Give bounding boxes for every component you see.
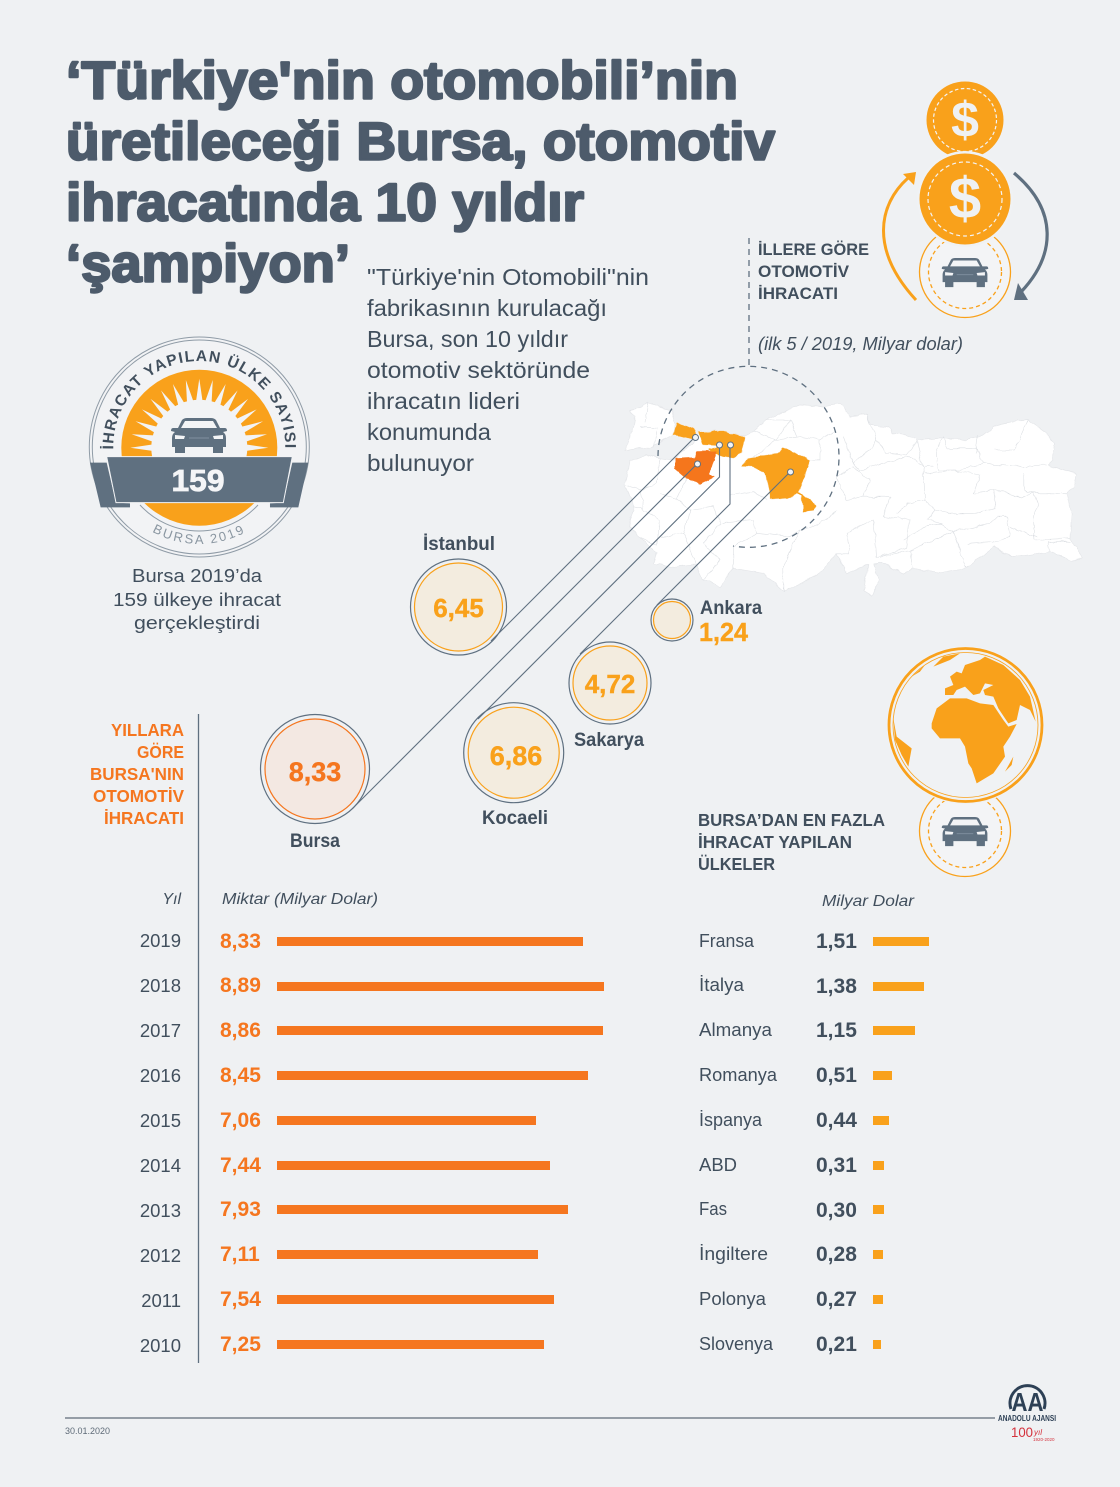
- province: Ankara: 1,24: [699, 617, 749, 647]
- bar chart: exports by year: 8,86: [220, 1019, 261, 1042]
- bar chart: top destination countries: 1,51: [816, 930, 857, 953]
- province: Kocaeli: 6,86: [490, 741, 542, 771]
- car: [171, 418, 227, 453]
- title: ihracatında 10 yıldır: [66, 174, 584, 232]
- bar chart: exports by year: 7,25: [220, 1333, 261, 1356]
- leader lines: [352, 437, 790, 809]
- bar chart: exports by year: 2010: [140, 1335, 181, 1356]
- intro paragraph: bulunuyor: [367, 450, 474, 476]
- bar chart: top destination countries: Polonya: [699, 1288, 767, 1309]
- top coin: $: [951, 92, 979, 148]
- badge caption: Bursa 2019’da: [132, 566, 263, 586]
- bar chart: top destination countries: İtalya: [699, 974, 745, 995]
- bar chart: top destination countries: Slovenya: [699, 1333, 774, 1354]
- bar chart: exports by year: 2014: [140, 1155, 181, 1176]
- footer line: [65, 1417, 995, 1419]
- title: ‘Türkiye'nin otomobili’nin: [66, 52, 738, 110]
- bar chart: top destination countries: 0,44: [816, 1109, 857, 1132]
- badge number: 159: [172, 463, 224, 498]
- intro paragraph: "Türkiye'nin Otomobili"nin: [367, 264, 649, 290]
- bar chart: exports by year: 8,45: [220, 1064, 261, 1087]
- province: Sakarya: [569, 642, 651, 751]
- bar chart: exports by year: 2019: [140, 930, 181, 951]
- ribbon: [90, 457, 308, 507]
- logo: Anadolu Ajansı: AA: [1012, 1387, 1044, 1417]
- bar chart: top destination countries: 0,27: [816, 1288, 857, 1311]
- bar chart: exports by year: 2011: [141, 1290, 181, 1311]
- bar chart: exports by year: 2018: [140, 975, 181, 996]
- logo: Anadolu Ajansı: 1920-2020: [1033, 1437, 1055, 1442]
- heading: top destination countries: [698, 810, 885, 874]
- map pins: [692, 434, 794, 475]
- bottom car circle: [920, 226, 1010, 318]
- bar chart: exports by year: 7,93: [220, 1198, 261, 1221]
- title: ‘şampiyon’: [66, 234, 350, 294]
- bar chart: exports by year: 8,89: [220, 974, 261, 997]
- province: Bursa: [260, 714, 370, 852]
- heading: Bursa exports by year: GÖRE: [137, 742, 184, 762]
- bar chart: top destination countries: Almanya: [699, 1019, 773, 1040]
- arrow: slate down: [1014, 173, 1047, 300]
- intro paragraph: fabrikasının kurulacağı: [367, 295, 607, 321]
- bar chart: top destination countries: Fas: [699, 1198, 727, 1219]
- car circle: [920, 786, 1010, 876]
- map of Turkey: [625, 403, 1083, 597]
- intro paragraph: Bursa, son 10 yıldır: [367, 326, 568, 352]
- bar chart: top destination countries: 1,38: [816, 975, 857, 998]
- badge caption: [113, 566, 281, 633]
- intro paragraph: otomotiv sektöründe: [367, 357, 590, 383]
- bar chart: exports by year: 2017: [140, 1020, 181, 1041]
- logo: Anadolu Ajansı: ANADOLU AJANSI: [998, 1413, 1056, 1423]
- badge caption: 159 ülkeye ihracat: [113, 590, 281, 610]
- dashed leader and zoom ring: [658, 238, 839, 547]
- province: Ankara: [651, 598, 762, 647]
- title: üretileceği Bursa, otomotiv: [66, 112, 776, 172]
- province: Sakarya: Sakarya: [574, 730, 644, 751]
- bar chart: exports by year: 2012: [140, 1245, 181, 1266]
- intro paragraph: ihracatın lideri: [367, 388, 520, 414]
- curved footer: BURSA 2019: [153, 524, 243, 544]
- bar chart: exports by year: [140, 930, 604, 1356]
- heading: exports by province: [758, 240, 869, 303]
- date: 30.01.2020: [65, 1426, 110, 1437]
- badge caption: gerçekleştirdi: [134, 613, 260, 633]
- province: İstanbul: İstanbul: [423, 534, 495, 555]
- bar chart: top destination countries: [699, 930, 929, 1356]
- bar chart: top destination countries: İspanya: [699, 1109, 763, 1130]
- bar chart: top destination countries: 1,15: [816, 1019, 857, 1042]
- column headers: Yıl: [162, 891, 181, 908]
- heading: Bursa exports by year: OTOMOTİV: [93, 786, 184, 806]
- province: İstanbul: [410, 534, 506, 655]
- highlighted provinces: [673, 422, 817, 512]
- intro paragraph: konumunda: [367, 419, 491, 445]
- province: Kocaeli: Kocaeli: [482, 808, 548, 829]
- curved heading: İHRACAT YAPILAN ÜLKE SAYISI: [100, 350, 296, 448]
- heading: top destination countries: İHRACAT YAPILAN: [698, 832, 852, 852]
- bar chart: exports by year: 2013: [140, 1200, 181, 1221]
- globe: [886, 646, 1044, 804]
- heading: exports by province: İLLERE GÖRE: [758, 240, 869, 259]
- heading: Bursa exports by year: [90, 720, 184, 828]
- title: [66, 52, 776, 294]
- heading: Bursa exports by year: BURSA'NIN: [90, 764, 184, 784]
- bar chart: top destination countries: ABD: [699, 1154, 737, 1175]
- sun: [121, 370, 277, 526]
- middle coin: [917, 151, 1013, 247]
- logo: Anadolu Ajansı: [998, 1386, 1056, 1442]
- heading: top destination countries: BURSA’DAN EN FAZLA: [698, 810, 885, 830]
- province: İstanbul: 6,45: [433, 593, 484, 623]
- bar chart: exports by year: 7,44: [220, 1154, 261, 1177]
- bar chart: top destination countries: Fransa: [699, 930, 755, 951]
- province: Bursa: 8,33: [289, 757, 341, 787]
- icon: money and car cycle: [884, 82, 1047, 318]
- intro paragraph: [367, 264, 649, 476]
- bar chart: top destination countries: 0,30: [816, 1199, 857, 1222]
- heading: exports by province: İHRACATI: [758, 284, 838, 303]
- middle coin: $: [949, 166, 981, 231]
- bar chart: top destination countries: Romanya: [699, 1064, 778, 1085]
- bar chart: top destination countries: 0,21: [816, 1333, 857, 1356]
- bar chart: top destination countries: 0,31: [816, 1154, 857, 1177]
- heading: Bursa exports by year: YILLARA: [111, 720, 184, 740]
- province borders: [625, 403, 1070, 592]
- bar chart: exports by year: 7,06: [220, 1109, 261, 1132]
- province: Kocaeli: [464, 703, 564, 829]
- bar chart: top destination countries: 0,51: [816, 1064, 857, 1087]
- subheading: province unit: (ilk 5 / 2019, Milyar dolar): [758, 334, 963, 354]
- column headers: Milyar Dolar: [822, 893, 915, 910]
- bar chart: exports by year: 2015: [140, 1110, 181, 1131]
- column headers: Miktar (Milyar Dolar): [222, 891, 378, 908]
- bar chart: exports by year: 8,33: [220, 930, 261, 953]
- heading: top destination countries: ÜLKELER: [698, 854, 775, 874]
- province: Sakarya: 4,72: [585, 669, 635, 699]
- logo: Anadolu Ajansı: yıl: [1033, 1428, 1042, 1437]
- heading: exports by province: OTOMOTİV: [758, 262, 850, 281]
- chart axis line: [198, 714, 200, 1363]
- bar chart: exports by year: 7,54: [220, 1288, 261, 1311]
- column headers: [162, 891, 915, 910]
- badge: 159 export countries: [88, 336, 310, 558]
- bar chart: top destination countries: 0,28: [816, 1243, 857, 1266]
- province: Ankara: Ankara: [700, 598, 762, 619]
- icon: globe with car: [886, 646, 1044, 876]
- province: Bursa: Bursa: [290, 831, 340, 852]
- bar chart: exports by year: 2016: [140, 1065, 181, 1086]
- bar chart: top destination countries: İngiltere: [699, 1243, 768, 1264]
- arrow: orange up: [884, 172, 916, 300]
- heading: Bursa exports by year: İHRACATI: [104, 808, 184, 828]
- bar chart: exports by year: 7,11: [220, 1243, 260, 1266]
- top coin: [926, 82, 1004, 158]
- logo: Anadolu Ajansı: 100: [1011, 1424, 1033, 1440]
- Bursa province: [675, 452, 717, 484]
